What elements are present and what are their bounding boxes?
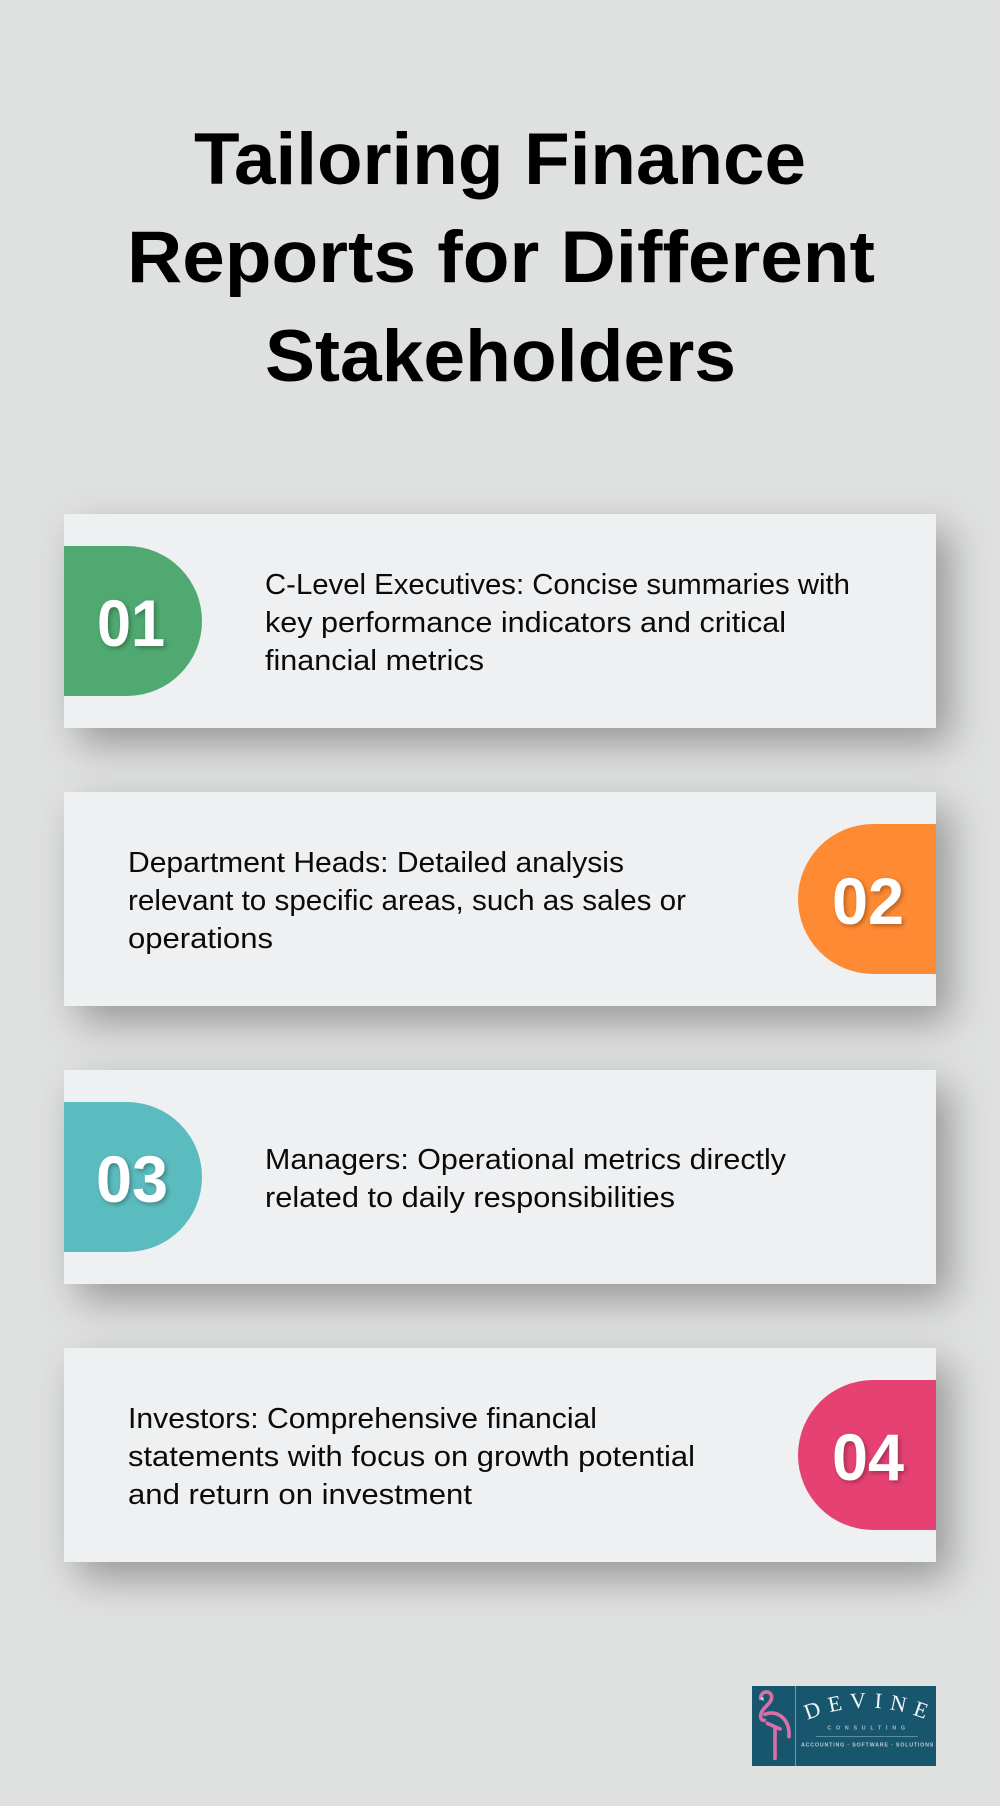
logo: Devine Consulting (752, 1686, 936, 1766)
icon: flamingo (760, 1692, 789, 1758)
logo wordmark: CONSULTING (827, 1725, 905, 1731)
title: Tailoring Finance (194, 119, 806, 200)
logo wordmark: DEVINE (803, 1693, 928, 1720)
panel: C-Level Executives (64, 514, 936, 728)
badge 01: 01 (97, 586, 165, 660)
badge 04 (798, 1380, 936, 1530)
logo wordmark (801, 1693, 934, 1748)
badge 02: 02 (832, 864, 904, 938)
text: C-Level Executives: key performance indicators and critical (265, 607, 786, 639)
text: Investors: Investors: Comprehensive financial (128, 1403, 597, 1435)
text: Department Heads: Department Heads: Detailed analysis (128, 847, 624, 879)
text: Managers: related to daily responsibilities (265, 1182, 675, 1214)
text: Investors: and return on investment (128, 1479, 472, 1511)
text: C-Level Executives: financial metrics (265, 645, 484, 677)
text: Investors (128, 1403, 695, 1511)
badge 03: 03 (96, 1142, 168, 1216)
text: C-Level Executives (265, 569, 850, 677)
badge 04: 04 (832, 1420, 904, 1494)
badge 03 (64, 1102, 202, 1252)
logo wordmark: ACCOUNTING · SOFTWARE · SOLUTIONS (801, 1742, 934, 1748)
text: Managers: Managers: Operational metrics directly (265, 1144, 787, 1176)
badge 02 (798, 824, 936, 974)
title (127, 119, 875, 397)
title: Stakeholders (265, 316, 736, 397)
text: Department Heads: relevant to specific areas, such as sales or (128, 885, 686, 917)
panel: Department Heads (64, 792, 936, 1006)
title: Reports for Different (127, 217, 875, 298)
panel: Managers (64, 1070, 936, 1284)
badge 01 (64, 546, 202, 696)
text: Investors: statements with focus on growth potential (128, 1441, 695, 1473)
text: Department Heads (128, 847, 686, 955)
text: Department Heads: operations (128, 923, 273, 955)
text: C-Level Executives: C-Level Executives: Concise summaries with (265, 569, 850, 601)
panel: Investors (64, 1348, 936, 1562)
text: Managers (265, 1144, 787, 1214)
